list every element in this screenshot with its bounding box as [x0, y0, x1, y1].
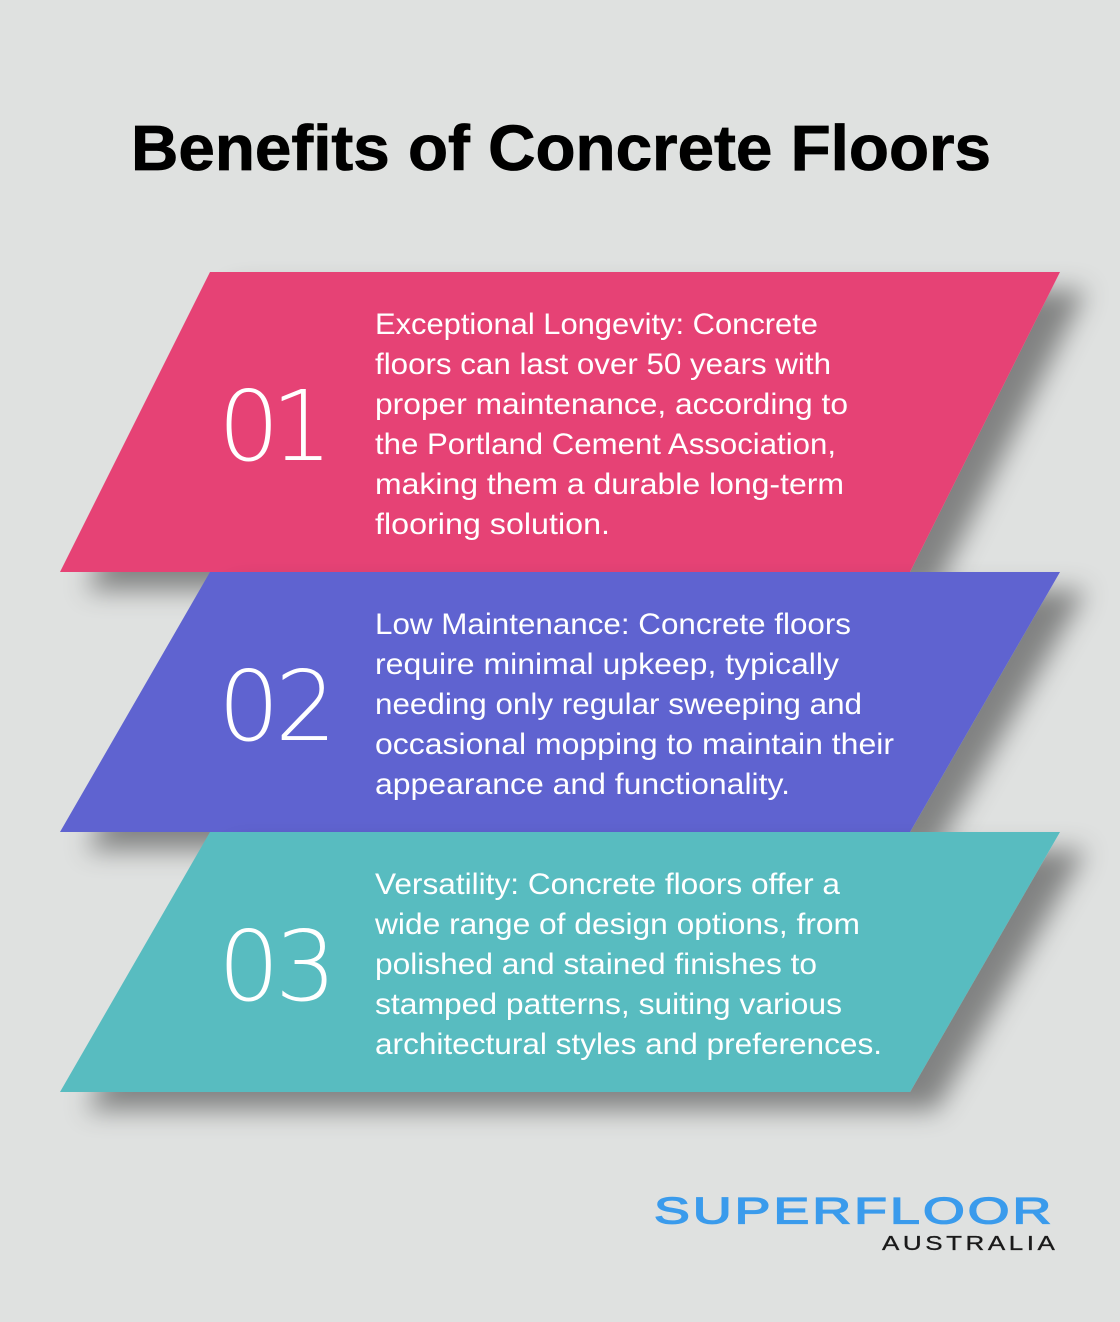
logo subline: AUSTRALIA — [882, 1232, 1055, 1254]
text block: longevity: flooring solution. — [375, 508, 610, 541]
parallelogram: teal — [60, 832, 1060, 1092]
text block: longevity: making them a durable long-term — [375, 468, 844, 501]
text block: maintenance: occasional mopping to maintain their — [375, 728, 894, 761]
number 01: 1 — [271, 370, 333, 483]
text block: versatility: polished and stained finishes to — [375, 948, 817, 981]
number 01: 0 — [218, 370, 280, 483]
logo wordmark: SUPERFLOOR — [654, 1190, 1051, 1232]
number 03: 0 — [218, 910, 280, 1023]
text block: maintenance: needing only regular sweeping and — [375, 688, 862, 721]
panel: 02 low maintenance — [60, 572, 1060, 832]
number 03: 3 — [275, 910, 337, 1023]
text block: versatility: Versatility: Concrete floors offer a — [375, 868, 840, 901]
number 02: 0 — [218, 650, 280, 763]
text block: maintenance: Low Maintenance: Concrete floors — [375, 608, 851, 641]
text block: longevity: proper maintenance, according to — [375, 388, 848, 421]
text block: maintenance: require minimal upkeep, typically — [375, 648, 839, 681]
text block: longevity: floors can last over 50 years with — [375, 348, 831, 381]
text block: versatility: wide range of design options, from — [374, 908, 860, 941]
parallelogram: blue — [60, 572, 1060, 832]
text block: versatility: stamped patterns, suiting various — [375, 988, 842, 1021]
text block: longevity — [375, 308, 848, 541]
text block: versatility: architectural styles and preferences. — [375, 1028, 882, 1061]
logo: Superfloor Australia — [654, 1190, 1055, 1254]
panel: 01 exceptional longevity — [60, 272, 1060, 572]
parallelogram: pink — [60, 272, 1060, 572]
title: Benefits of Concrete Floors — [131, 112, 991, 184]
text block: longevity: the Portland Cement Association, — [375, 428, 836, 461]
panel: 03 versatility — [60, 832, 1060, 1092]
number 02: 2 — [275, 650, 337, 763]
text block: longevity: Exceptional Longevity: Concrete — [375, 308, 818, 341]
text block: versatility — [374, 868, 882, 1061]
text block: maintenance: appearance and functionality. — [375, 768, 790, 801]
text block: maintenance — [375, 608, 894, 801]
